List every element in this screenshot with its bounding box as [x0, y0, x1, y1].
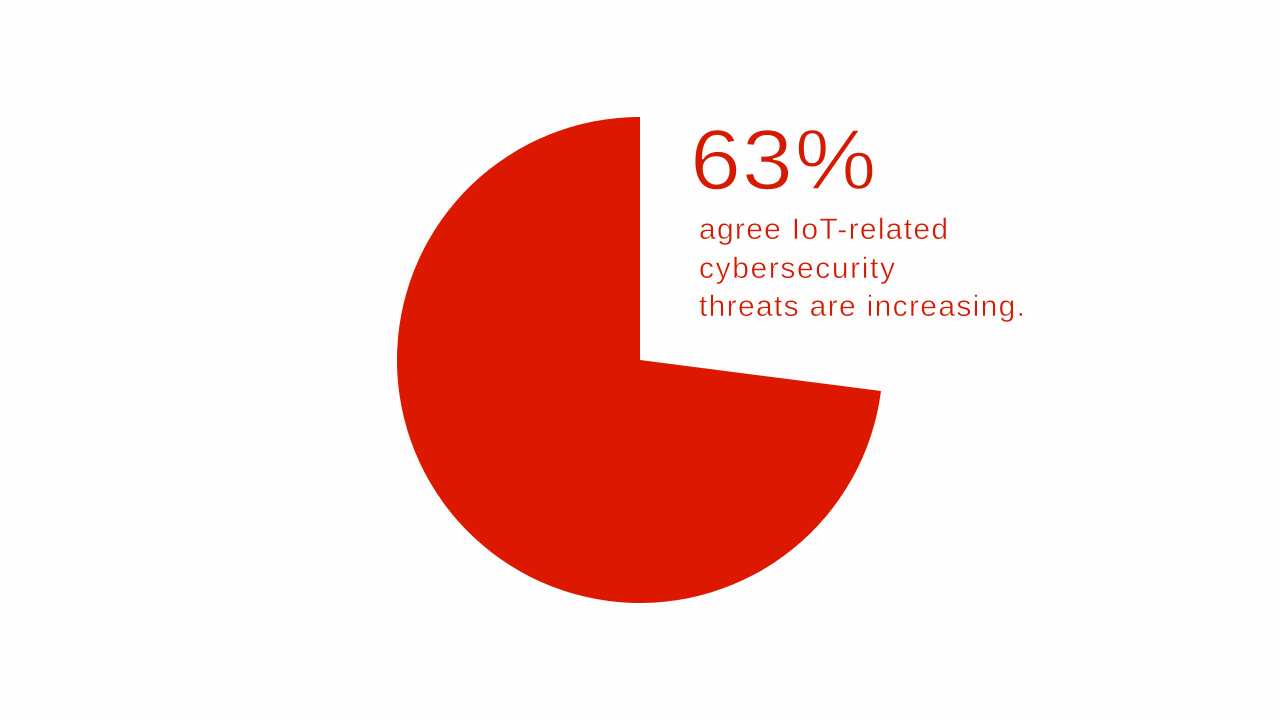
description text: threats are increasing.	[699, 290, 1025, 323]
description text: cybersecurity	[699, 252, 895, 285]
description text	[699, 213, 1025, 323]
statistic: 63%: 63%	[690, 112, 876, 207]
description text: agree IoT-related	[699, 213, 948, 246]
pie chart: 63 percent wedge	[397, 117, 881, 603]
